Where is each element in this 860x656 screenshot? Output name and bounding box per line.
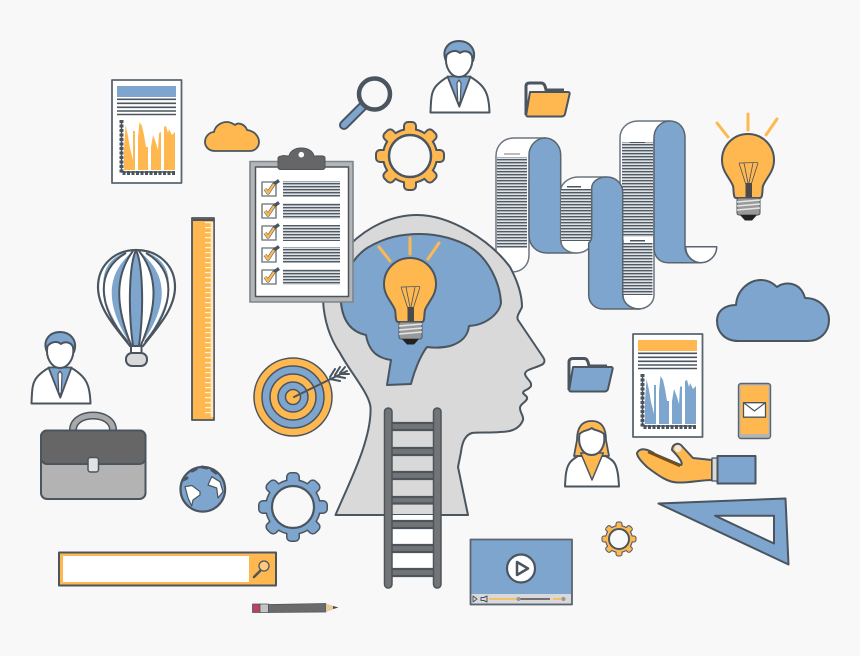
icon: blue gear bbox=[260, 474, 326, 540]
icon: briefcase bbox=[41, 416, 146, 499]
head silhouette bbox=[323, 215, 544, 515]
brain bbox=[341, 234, 501, 385]
icon: target with arrow bbox=[254, 358, 349, 436]
video player bbox=[470, 540, 572, 604]
search bar bbox=[59, 552, 276, 586]
icon: orange gear bbox=[377, 123, 443, 189]
ruler bbox=[192, 218, 214, 420]
icon: phone with mail bbox=[738, 384, 770, 438]
scroll: right blue ribbon bbox=[654, 121, 701, 263]
icon: magnifying glass bbox=[344, 78, 390, 125]
icon: small orange cloud bbox=[205, 122, 259, 151]
icon: set square bbox=[658, 498, 788, 564]
chart report: orange bars bbox=[112, 80, 182, 183]
icon: light bulb in brain bbox=[379, 238, 439, 344]
ladder: lower window backgrounds bbox=[392, 515, 434, 570]
paper scrolls bbox=[496, 121, 717, 309]
scroll: middle bbox=[561, 177, 606, 253]
icon: pencil bbox=[252, 604, 338, 612]
icon: top businessman bbox=[430, 41, 490, 112]
ladder bbox=[384, 408, 441, 588]
scroll: middle blue ribbon bbox=[589, 177, 640, 309]
icon: orange folder bbox=[526, 83, 570, 116]
icon: globe bbox=[180, 467, 225, 512]
icon: big blue cloud bbox=[717, 280, 829, 341]
icon: open hand bbox=[637, 444, 756, 484]
icon: top-right light bulb bbox=[717, 114, 777, 220]
chart report: blue bars bbox=[633, 334, 702, 437]
scroll: right curl bbox=[686, 247, 717, 263]
icon: hot air balloon bbox=[98, 250, 175, 366]
scroll: left bbox=[496, 138, 577, 272]
scroll: right column bbox=[620, 121, 670, 309]
icon: blue folder bbox=[569, 358, 613, 392]
clipboard checklist bbox=[250, 148, 353, 302]
icon: businesswoman bbox=[565, 421, 619, 486]
icon: small orange gear bbox=[602, 522, 636, 556]
icon: left businessman bbox=[32, 332, 90, 404]
